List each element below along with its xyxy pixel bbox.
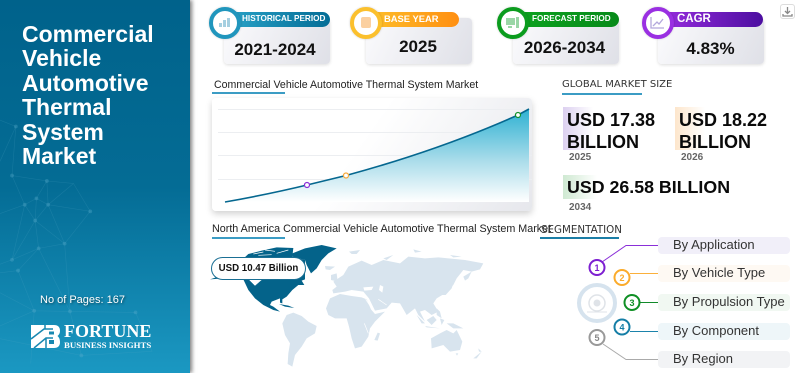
tint [563,175,597,199]
node 3: 3 [629,298,635,308]
node 4 [614,320,630,334]
arctic channels [253,250,288,255]
logo tagline: BUSINESS INSIGHTS [64,340,151,350]
segment: vehicle type [658,265,790,282]
year: 2025 [569,152,591,162]
title: Thermal [22,94,111,120]
network pattern [0,120,152,364]
segment: vehicle type: By Vehicle Type [673,265,765,280]
card body [224,18,330,64]
header ribbon [225,12,330,26]
icon ring [497,7,529,39]
heading: regional map: North America Commercial Vehicle Automotive Thermal System Market [212,223,551,235]
tint [675,107,705,150]
segment: application: By Application [673,237,755,252]
header ribbon: HISTORICAL PERIOD [242,14,325,23]
card body [513,18,619,64]
marker 2025 [344,173,348,178]
title: Market [22,143,96,169]
amount: USD 26.58 BILLION [567,177,730,197]
segment: propulsion type: By Propulsion Type [673,294,785,309]
stat: 2026 [675,107,767,162]
Eurasia, Africa, Oceania [325,249,483,358]
node 1 [590,260,604,275]
area line chart [218,108,530,203]
stat: 2025 [563,107,655,162]
North America highlight [210,245,337,312]
year: 2034 [569,202,591,213]
tint [563,107,593,150]
South America [282,313,317,367]
header ribbon: FORECAST PERIOD [532,14,611,23]
segment: region: By Region [673,351,733,366]
callout pointer [248,279,263,286]
node 5 [590,330,604,345]
title: Vehicle [22,45,101,71]
title [22,21,154,169]
hub icon [579,285,615,321]
node 3 [624,295,640,310]
node 5: 5 [594,333,600,343]
icon: download [780,4,795,19]
card: forecast period [496,6,620,66]
title: System [22,119,104,145]
card body [658,18,764,64]
header ribbon [366,12,459,26]
segment: application [658,237,790,254]
card: historical period [208,6,331,66]
logo mark [31,325,60,348]
connectors [602,246,658,360]
amount [679,110,767,152]
icon ring [209,7,241,39]
title: Commercial [22,21,154,47]
panel: growth chart [212,98,532,211]
card body [366,18,472,64]
stat: 2034 [563,175,730,213]
heading: global market size: GLOBAL MARKET SIZE [562,79,672,90]
icon ring [350,7,382,39]
node 4: 4 [619,322,625,332]
title: Automotive [22,70,148,96]
heading: market chart: Commercial Vehicle Automotive Thermal System Market [214,79,478,91]
segment: component [658,323,790,340]
panel: sidebar [0,0,190,373]
marker 2034 [516,112,520,118]
value: 4.83% [686,38,735,58]
node 2 [614,270,630,285]
node 1: 1 [594,263,600,273]
heading: segmentation: SEGMENTATION [541,224,622,236]
amount: BILLION [567,132,639,152]
header ribbon: BASE YEAR [384,13,439,24]
callout: North America value [211,257,306,280]
value: 2025 [399,37,437,56]
callout: North America value: USD 10.47 Billion [219,263,298,274]
segment: component: By Component [673,323,759,338]
amount: BILLION [679,132,751,152]
card: base year [349,6,473,66]
card: CAGR [641,6,765,66]
value: 2021-2024 [234,40,316,59]
amount: USD 18.22 [679,110,767,130]
segmentation diagram [577,245,658,360]
marker 2021 [304,182,310,188]
logo wordmark: FORTUNE [64,321,151,341]
header ribbon [513,12,619,26]
header ribbon: CAGR [677,13,711,25]
header ribbon [658,12,763,26]
segment: region [658,351,790,368]
amount [567,110,655,152]
icon ring [642,7,674,39]
year: 2026 [681,152,703,162]
value: 2026-2034 [524,38,605,57]
node 2: 2 [619,273,625,283]
Americas [210,245,337,367]
amount: USD 17.38 [567,110,655,130]
logo [31,321,151,350]
pages count: No of Pages: 167 [40,294,125,306]
